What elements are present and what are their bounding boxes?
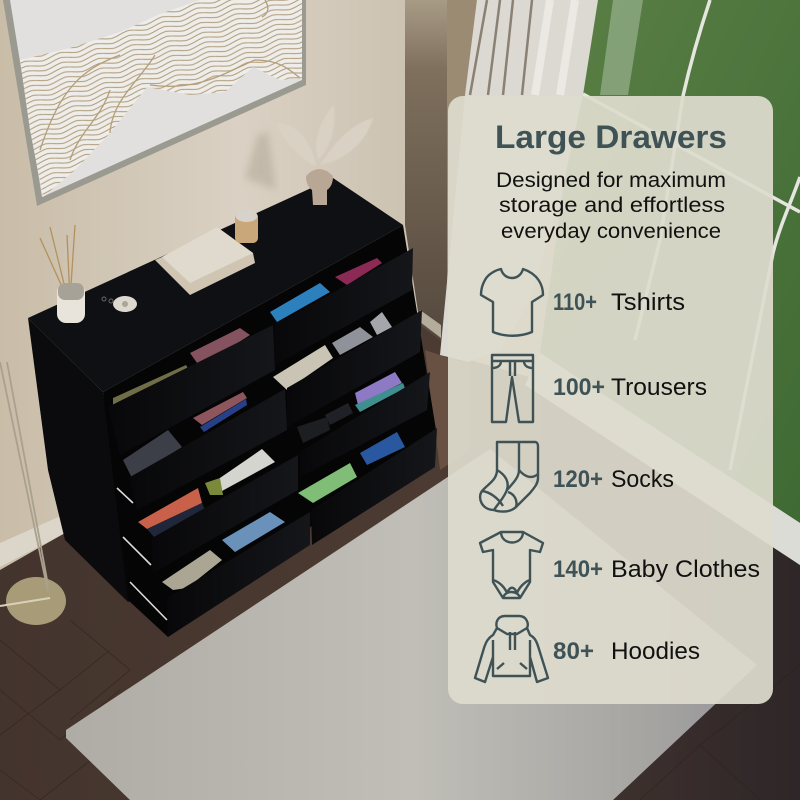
row: socks	[480, 442, 674, 512]
baseboard	[0, 515, 65, 567]
count: 100+	[553, 374, 605, 401]
row: baby clothes	[480, 532, 760, 598]
icon: trousers	[492, 355, 533, 422]
row: trousers	[492, 355, 707, 422]
drawer row 4	[162, 428, 437, 637]
pampas shadow on the wall	[245, 132, 276, 190]
drawer slides	[117, 488, 167, 620]
info panel	[448, 96, 773, 704]
label: Tshirts	[611, 289, 685, 316]
row: tshirts	[481, 269, 685, 336]
row: hoodies	[475, 616, 700, 682]
label: Hoodies	[611, 638, 700, 665]
dresser	[28, 178, 437, 637]
count: 140+	[553, 556, 603, 583]
description: storage and effortless	[499, 194, 725, 217]
drawer row 3	[138, 372, 430, 573]
dresser body	[103, 225, 436, 637]
icon: hoodie	[475, 616, 548, 682]
floor lamp	[0, 362, 66, 625]
curtain	[440, 0, 598, 362]
dresser top	[28, 178, 403, 392]
reed diffuser	[40, 225, 85, 323]
vase with pampas	[276, 105, 373, 205]
herringbone floor pattern	[0, 620, 800, 800]
dresser side panel	[28, 318, 135, 602]
count: 120+	[553, 466, 603, 493]
sunlit floor near the dresser	[425, 350, 470, 470]
icon: baby bodysuit	[480, 532, 543, 598]
framed wall art	[3, 0, 306, 206]
icon: socks	[480, 442, 538, 512]
count: 80+	[553, 638, 594, 665]
dark wall section and right baseboard	[405, 0, 477, 345]
drawer row 1	[108, 248, 413, 455]
label: Trousers	[611, 374, 707, 401]
panel background	[448, 96, 773, 704]
heading: Large Drawers	[495, 119, 727, 155]
drawer row 2	[123, 310, 422, 510]
candle	[235, 210, 258, 243]
rug	[66, 449, 757, 800]
room background: floor	[0, 325, 800, 800]
count: 110+	[553, 289, 597, 316]
small dish and rings	[102, 296, 137, 312]
window with grass view	[525, 0, 800, 565]
wavy line artwork	[20, 0, 302, 197]
description: everyday convenience	[501, 220, 721, 243]
label: Socks	[611, 466, 674, 493]
description	[496, 169, 726, 243]
description: Designed for maximum	[496, 169, 726, 192]
stacked books	[155, 227, 255, 295]
icon: t-shirt	[481, 269, 543, 336]
label: Baby Clothes	[611, 556, 760, 583]
